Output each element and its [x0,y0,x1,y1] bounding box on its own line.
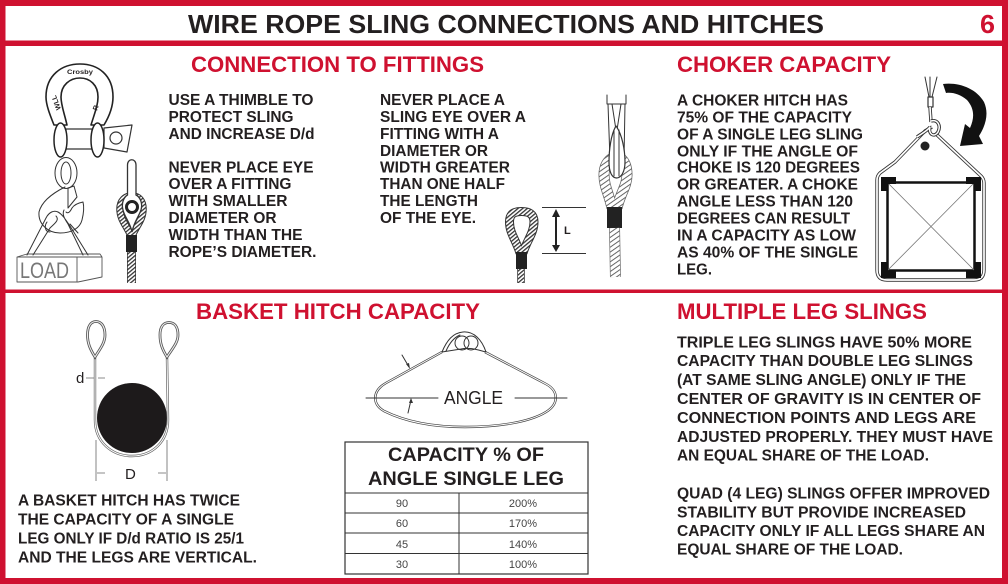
icon: eye sling with thimble [120,160,143,283]
text block: choker hitch: DEGREES CAN RESULT [677,210,851,228]
text block: choker hitch: LEG. [677,262,712,278]
text block: sling eye advice [380,92,526,227]
text block: choker hitch: OF A SINGLE LEG SLING [677,126,863,144]
table: capacity by angle [345,442,588,574]
heading: connection to fittings: CONNECTION TO FITTINGS [191,52,484,77]
table: capacity by angle: 140% [509,539,537,551]
text block: choker hitch: 75% OF THE CAPACITY [677,110,853,126]
text block: choker hitch: CHOKE IS 120 DEGREES [677,160,860,176]
text block: sling eye advice: SLING EYE OVER A [380,109,526,126]
text block: choker hitch: IN A CAPACITY AS LOW [677,228,856,244]
text block: sling eye advice: THE LENGTH [380,193,478,210]
text block: quad leg slings: QUAD (4 LEG) SLINGS OFFER IMPROVED [677,486,990,502]
text block: triple leg slings: AN EQUAL SHARE OF THE LOAD. [677,448,929,464]
text block: basket hitch: LEG ONLY IF D/d RATIO IS 25/1 [18,530,244,548]
label: angle: ANGLE [444,388,503,408]
text block: thimble advice: ROPE’S DIAMETER. [168,244,316,261]
table: capacity by angle: 45 [396,539,408,551]
table: capacity by angle: ANGLE SINGLE LEG [368,468,564,490]
icon: choker hitch on square load [877,77,986,280]
text block: sling eye advice: OF THE EYE. [380,210,476,227]
text block: basket hitch [18,492,257,566]
text block: triple leg slings: CONNECTION POINTS AND LEGS ARE [677,410,976,427]
text block: thimble advice: WITH SMALLER [168,193,288,210]
text block: sling eye advice: NEVER PLACE A [380,92,505,109]
icon: shackle: WLL [51,93,63,111]
table: capacity by angle: 60 [396,518,408,530]
table: capacity by angle: 170% [509,518,537,530]
text block: thimble advice: USE A THIMBLE TO [168,92,314,109]
text block: choker hitch: A CHOKER HITCH HAS [677,92,848,110]
table: capacity by angle: 200% [509,498,537,510]
panel: connection to fittings [17,52,627,283]
text block: triple leg slings: CAPACITY THAN DOUBLE LEG SLINGS [677,353,973,370]
label: D: D [125,466,136,483]
text block: quad leg slings: STABILITY BUT PROVIDE INCREASED [677,504,966,522]
text block: choker hitch: ANGLE LESS THAN 120 [677,194,853,210]
icon: shackle: R [92,105,101,112]
text block: thimble advice: NEVER PLACE EYE [168,160,314,176]
text block: quad leg slings [677,486,990,558]
icon: shackle [46,64,132,157]
heading: multiple leg slings: MULTIPLE LEG SLINGS [677,299,927,324]
text block: quad leg slings: CAPACITY ONLY IF ALL LEGS SHARE AN [677,523,985,540]
label: d: d [76,370,84,387]
text block: sling eye advice: THAN ONE HALF [380,176,505,193]
label: L: L [564,225,571,237]
text block: thimble advice: AND INCREASE D/d [168,126,314,143]
arrow: choke direction [943,84,986,146]
icon: hook with load [17,158,102,283]
icon: shackle: Crosby [67,69,93,76]
icon: sling eye with length dimension [510,208,586,283]
text block: choker hitch [677,92,863,278]
text block: triple leg slings: ADJUSTED PROPERLY. THEY MUST HAVE [677,429,993,446]
text block: triple leg slings: CENTER OF GRAVITY IS IN CENTER OF [677,391,981,408]
text block: thimble advice [168,92,316,261]
text block: sling eye advice: FITTING WITH A [380,126,499,143]
table: capacity by angle: 30 [396,559,408,571]
table: capacity by angle: 100% [509,559,537,571]
text block: quad leg slings: EQUAL SHARE OF THE LOAD. [677,542,903,558]
load label: LOAD [20,258,69,283]
icon: sling on hook fitting [604,95,627,277]
table: capacity by angle: 90 [396,498,408,510]
text block: triple leg slings: TRIPLE LEG SLINGS HAVE 50% MORE [677,334,972,352]
text block: thimble advice: PROTECT SLING [168,109,294,126]
text block: sling eye advice: DIAMETER OR [380,143,488,160]
text block: triple leg slings [677,334,993,464]
text block: sling eye advice: WIDTH GREATER [380,160,510,176]
text block: basket hitch: A BASKET HITCH HAS TWICE [18,492,240,510]
text block: choker hitch: AS 40% OF THE SINGLE [677,244,858,262]
text block: choker hitch: OR GREATER. A CHOKE [677,176,858,194]
heading: basket hitch capacity: BASKET HITCH CAPACITY [196,299,480,324]
panel: multiple leg slings [677,299,993,558]
text block: basket hitch: AND THE LEGS ARE VERTICAL. [18,550,257,566]
panel: basket hitch capacity [18,299,588,574]
icon: basket hitch diagram [76,322,178,483]
icon: sling angle diagram [366,332,567,427]
panel: choker capacity [677,52,986,280]
heading: choker capacity: CHOKER CAPACITY [677,52,891,77]
text block: basket hitch: THE CAPACITY OF A SINGLE [18,512,234,528]
text block: choker hitch: ONLY IF THE ANGLE OF [677,144,858,160]
text block: thimble advice: OVER A FITTING [168,176,292,193]
page number: 6 [980,9,995,39]
table heading: CAPACITY % OF [388,444,544,466]
title: WIRE ROPE SLING CONNECTIONS AND HITCHES [188,9,824,39]
text block: thimble advice: DIAMETER OR [168,210,276,227]
text block: triple leg slings: (AT SAME SLING ANGLE) ONLY IF THE [677,372,966,389]
text block: thimble advice: WIDTH THAN THE [168,227,302,244]
